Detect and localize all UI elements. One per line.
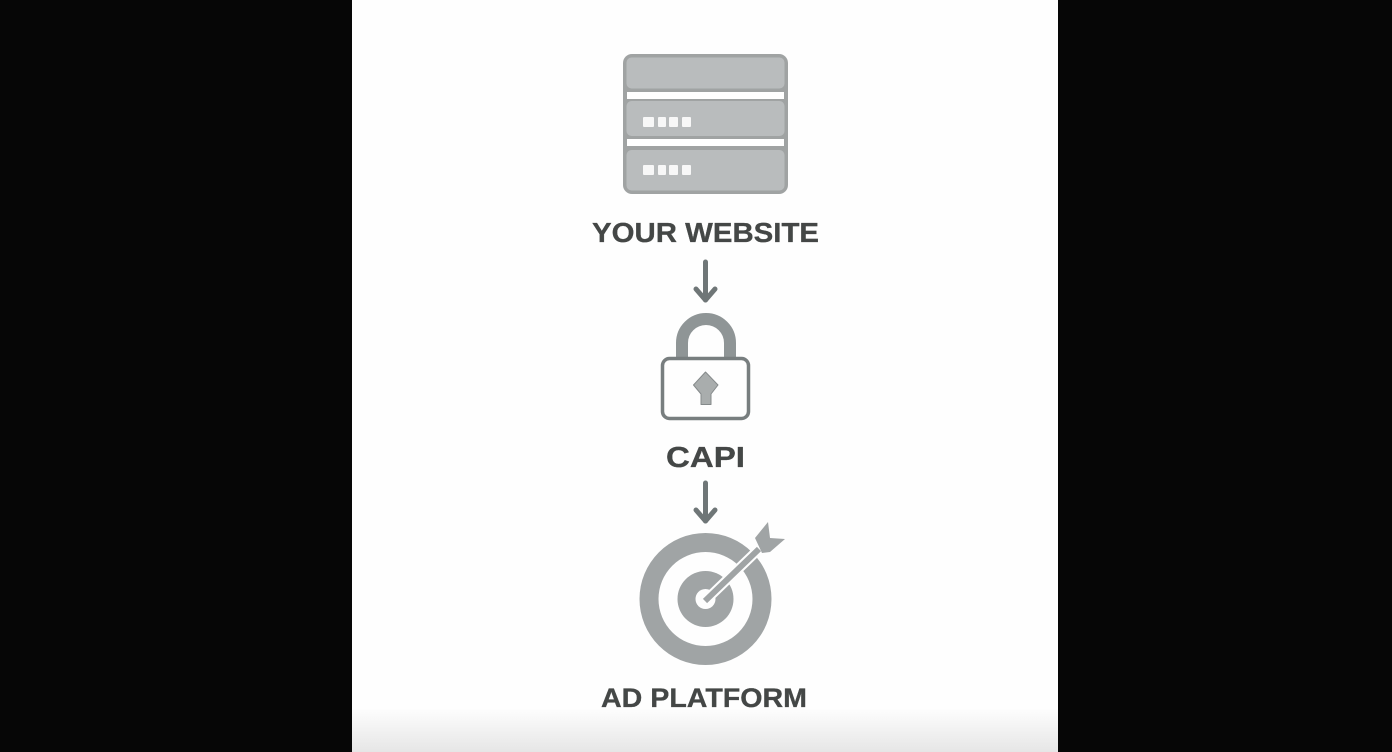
icon: target with arrow	[640, 522, 785, 665]
panel: white centre column	[352, 0, 1058, 752]
heading: your website: YOUR WEBSITE	[592, 217, 819, 248]
arrow: capi to ad platform	[696, 483, 715, 521]
heading: ad platform: AD PLATFORM	[601, 683, 807, 713]
heading: capi: CAPI	[666, 442, 745, 474]
icon: server website stack	[623, 54, 788, 194]
arrow: website to capi	[696, 262, 715, 300]
icon: padlock	[662, 319, 748, 418]
